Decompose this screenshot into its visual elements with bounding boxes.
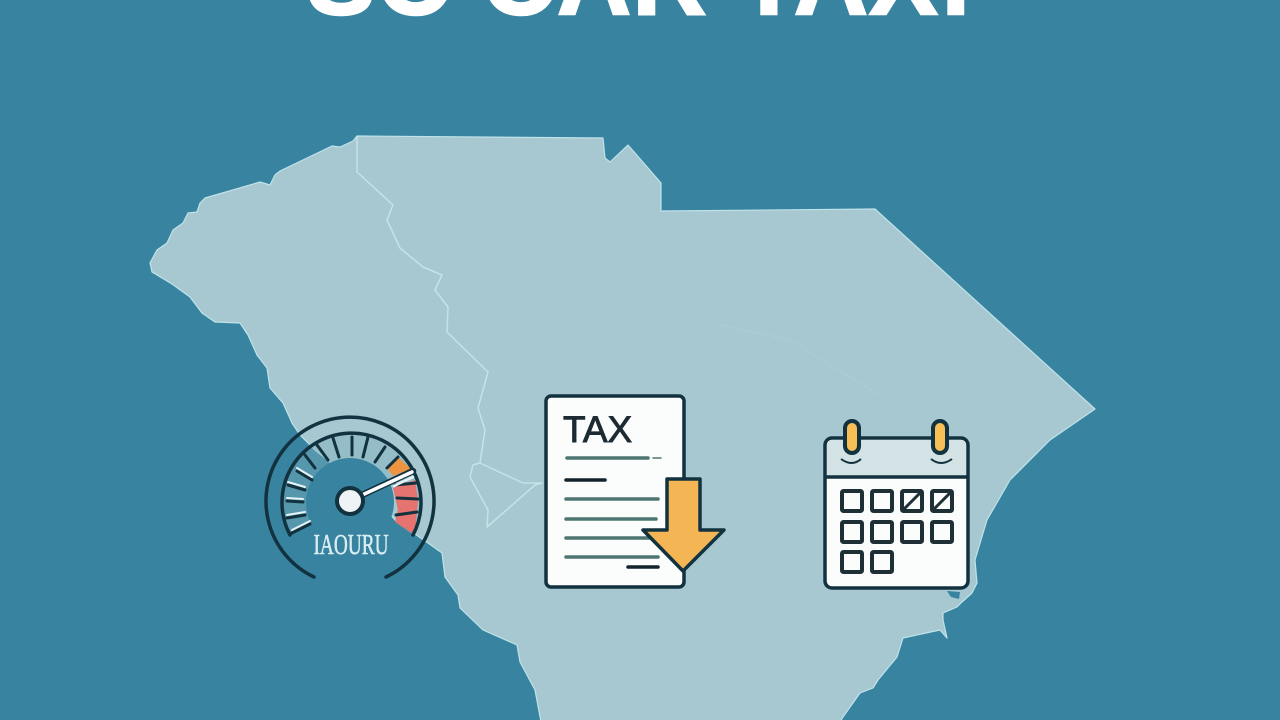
gauge orange segment xyxy=(387,457,411,476)
gauge label: IAOURU xyxy=(314,530,388,561)
gauge red segment xyxy=(393,480,418,535)
calendar rings xyxy=(841,421,952,463)
calendar header xyxy=(827,440,966,477)
icon: speedometer gauge xyxy=(266,417,434,577)
download arrow xyxy=(643,479,724,571)
document heading: TAX xyxy=(563,409,632,450)
gauge ring background xyxy=(282,433,421,535)
gauge inner dial xyxy=(306,458,394,546)
gauge needle xyxy=(360,471,413,496)
gauge ticks xyxy=(287,437,418,533)
gauge hub xyxy=(337,488,363,514)
gauge inner and outer arcs xyxy=(266,417,434,577)
document sheet xyxy=(546,396,684,587)
calendar body xyxy=(825,438,968,588)
icon: calendar xyxy=(825,421,968,588)
icon: tax document with download arrow xyxy=(546,396,724,587)
calendar day cells xyxy=(842,491,952,572)
document lines xyxy=(566,458,661,567)
map: South Carolina xyxy=(150,136,1095,720)
gauge light ticks xyxy=(287,468,312,530)
